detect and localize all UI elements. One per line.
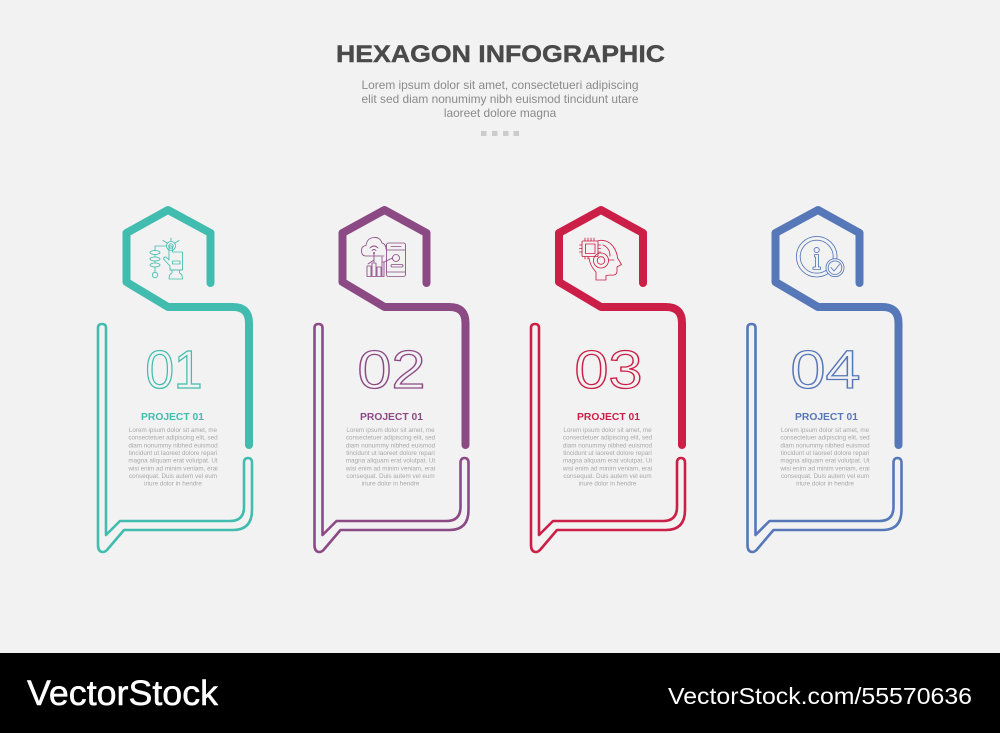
body text 01: wisi enim ad minim veniam, erai	[127, 465, 218, 472]
body text 04: iriure dolor in hendre	[796, 481, 854, 488]
panel: project 02	[314, 210, 468, 552]
heading project 04: PROJECT 01	[795, 411, 858, 423]
body text 03	[562, 427, 653, 488]
body text 04: magna aliquam erat volutpat. Ut	[780, 458, 870, 465]
body text 03: wisi enim ad minim veniam, erai	[562, 465, 652, 472]
body text 02	[345, 427, 436, 488]
body text 01: consequat. Duis autem vel eum	[129, 473, 217, 480]
icon: info circle with check	[796, 236, 844, 277]
panel: project 03	[531, 210, 685, 552]
number 02: 02	[358, 340, 426, 400]
body text 03: diam nonummy nibhed euismod	[563, 442, 653, 449]
body text 03: Lorem ipsum dolor sit amet, me	[563, 427, 652, 434]
speech bubble outline 03	[531, 324, 685, 552]
subtitle text	[362, 78, 639, 120]
body text 03: magna aliquam erat volutpat. Ut	[563, 458, 652, 465]
body text 01: diam nonummy nibhed euismod	[128, 442, 218, 449]
hexagon ribbon 02	[342, 210, 466, 445]
body text 04: consectetuer adipiscing elit, sed	[780, 435, 870, 442]
footer brand: VectorStock	[27, 674, 219, 713]
body text 01: iriure dolor in hendre	[144, 481, 202, 488]
number 01: 01	[146, 340, 202, 400]
title dots	[481, 131, 519, 136]
panel: project 01	[98, 210, 252, 552]
footer bar	[0, 653, 1000, 733]
speech bubble outline 02	[314, 324, 468, 552]
body text 04: diam nonummy nibhed euismod	[780, 442, 870, 449]
body text 02: Lorem ipsum dolor sit amet, me	[346, 427, 435, 434]
number 04: 04	[790, 340, 860, 400]
body text 01: consectetuer adipiscing elit, sed	[128, 435, 218, 442]
body text 01: tincidunt ut laoreet dolore repari	[129, 450, 217, 457]
speech bubble outline 04	[748, 324, 902, 552]
subtitle text: elit sed diam nonumimy nibh euismod tincidunt utare	[362, 92, 639, 106]
body text 01: magna aliquam erat volutpat. Ut	[128, 458, 218, 465]
body text 03: iriure dolor in hendre	[579, 481, 637, 488]
body text 03: tincidunt ut laoreet dolore repari	[563, 450, 652, 457]
body text 04: tincidunt ut laoreet dolore repari	[781, 450, 869, 457]
speech bubble outline 01	[98, 324, 252, 552]
body text 04: Lorem ipsum dolor sit amet, me	[781, 427, 870, 434]
body text 04	[779, 427, 870, 488]
footer url: VectorStock.com/55570636	[668, 683, 972, 709]
title: HEXAGON INFOGRAPHIC	[336, 41, 665, 68]
body text 04: wisi enim ad minim veniam, erai	[779, 465, 870, 472]
subtitle text: laoreet dolore magna	[444, 106, 557, 120]
hexagon ribbon 04	[776, 210, 898, 445]
body text 02: magna aliquam erat volutpat. Ut	[346, 458, 435, 465]
hexagon ribbon 01	[126, 210, 249, 445]
body text 03: consectetuer adipiscing elit, sed	[563, 435, 653, 442]
panel: project 04	[748, 210, 902, 552]
body text 02: tincidunt ut laoreet dolore repari	[346, 450, 435, 457]
body text 03: consequat. Duis autem vel eum	[563, 473, 652, 480]
heading project 03: PROJECT 01	[577, 411, 640, 423]
icon: AI head with chip	[580, 238, 622, 280]
heading project 01: PROJECT 01	[141, 411, 204, 423]
icon: cloud and phone	[362, 237, 406, 276]
heading project 02: PROJECT 01	[360, 411, 423, 423]
subtitle text: Lorem ipsum dolor sit amet, consectetueri adipiscing	[362, 78, 638, 92]
number 03: 03	[574, 340, 642, 400]
body text 02: wisi enim ad minim veniam, erai	[345, 465, 435, 472]
body text 02: diam nonummy nibhed euismod	[346, 442, 436, 449]
body text 04: consequat. Duis autem vel eum	[781, 473, 869, 480]
body text 02: consectetuer adipiscing elit, sed	[346, 435, 436, 442]
body text 01	[127, 427, 218, 488]
body text 01: Lorem ipsum dolor sit amet, me	[129, 427, 218, 434]
hexagon ribbon 03	[559, 210, 682, 445]
icon: robot hand and flowchart	[150, 238, 182, 279]
body text 02: iriure dolor in hendre	[362, 481, 420, 488]
body text 02: consequat. Duis autem vel eum	[346, 473, 435, 480]
